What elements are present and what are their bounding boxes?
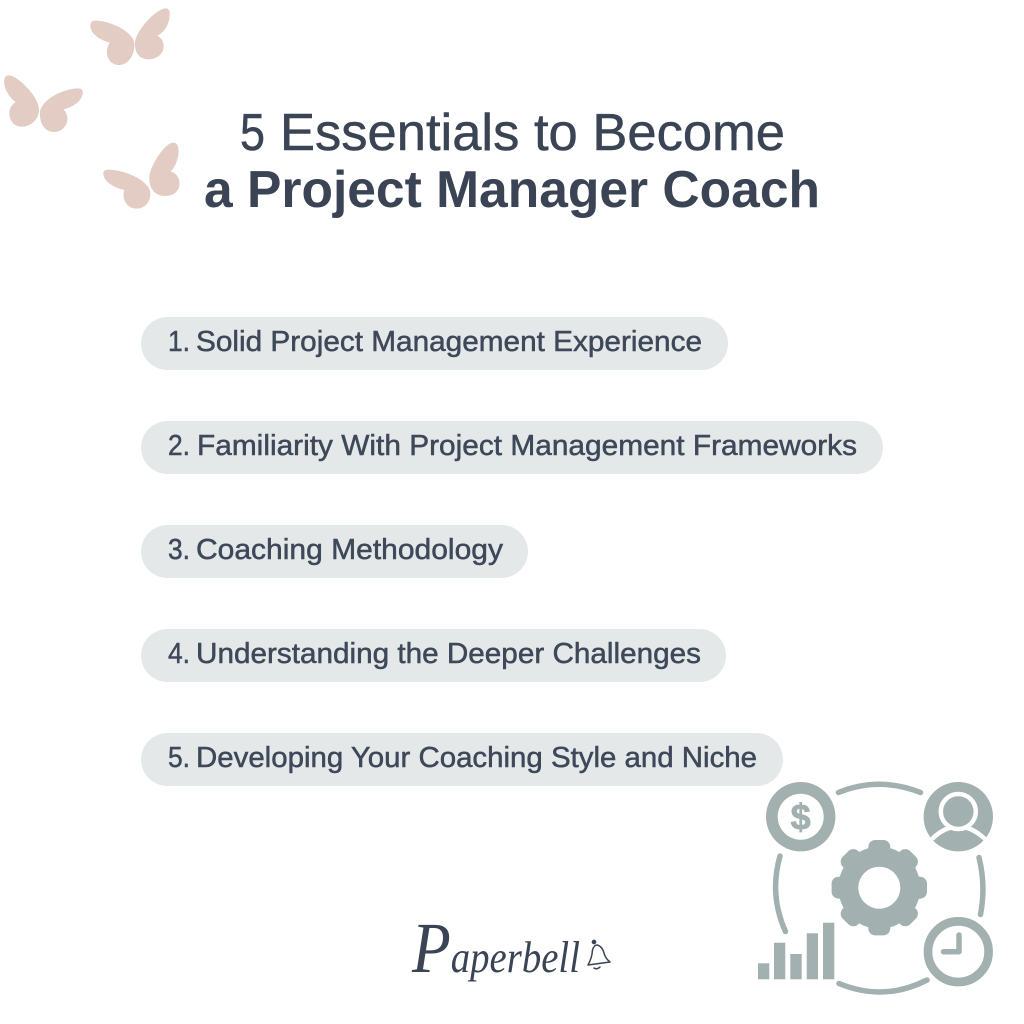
item 5 <box>141 733 783 786</box>
item 1 <box>141 317 728 370</box>
icon: bar chart <box>758 923 834 979</box>
logo wordmark: Paperbell <box>411 908 580 988</box>
item 3: Coaching Methodology <box>196 534 504 566</box>
item 2 <box>141 421 883 474</box>
item 3: 3. <box>168 534 190 566</box>
butterfly: lower <box>103 143 180 209</box>
icon: bell <box>588 940 610 969</box>
list of essentials <box>141 317 883 786</box>
icon: clock <box>928 921 989 982</box>
item 4: 4. <box>168 638 190 670</box>
icon: gear <box>832 840 927 935</box>
title line 1: 5 <box>240 104 265 162</box>
project management cycle illustration <box>758 782 993 992</box>
decorative butterflies <box>4 8 180 209</box>
item 1: 1. <box>168 326 190 358</box>
item 2: 2. <box>168 430 190 462</box>
Paperbell logo <box>411 908 610 988</box>
title line 2: a Project Manager Coach <box>204 161 820 219</box>
item 2: Familiarity With Project Management Frameworks <box>197 430 857 462</box>
item 5: 5. <box>168 742 190 774</box>
icon: dollar coin: $ <box>791 796 811 838</box>
connecting arcs <box>776 784 983 992</box>
item 3 <box>141 525 528 578</box>
item 1: Solid Project Management Experience <box>196 326 702 358</box>
item 4 <box>141 629 726 682</box>
butterfly: top <box>90 8 170 65</box>
item 5: Developing Your Coaching Style and Niche <box>196 742 757 774</box>
butterfly: left <box>4 75 83 132</box>
title line 1: Essentials to Become <box>280 104 785 162</box>
item 4: Understanding the Deeper Challenges <box>196 638 701 670</box>
icon: dollar coin <box>766 782 835 851</box>
title <box>204 104 820 219</box>
icon: person <box>924 782 993 851</box>
